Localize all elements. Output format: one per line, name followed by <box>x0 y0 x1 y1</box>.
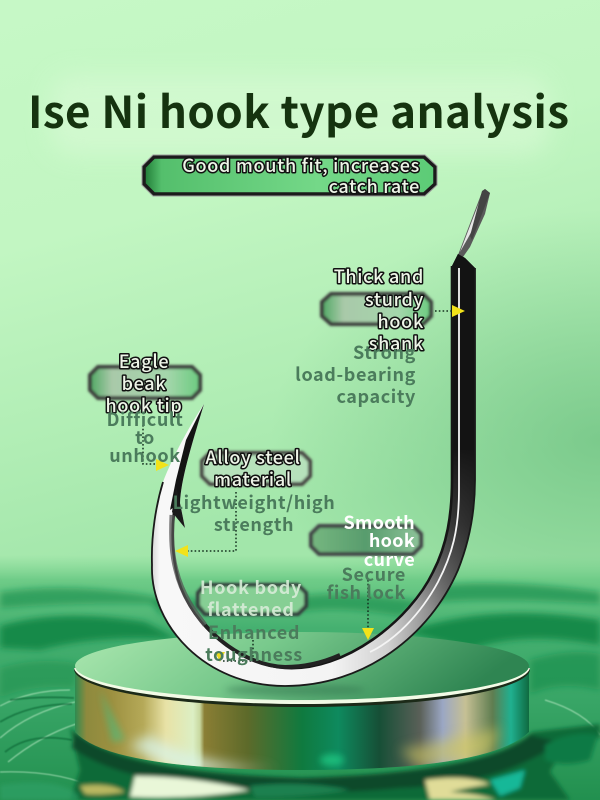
water surface <box>0 555 600 800</box>
pill: good mouth fit <box>142 155 437 196</box>
benefit: secure fish lock: fish lock <box>327 579 406 605</box>
label: alloy steel: material <box>214 466 292 492</box>
hook contact shadow <box>225 684 365 696</box>
hook eye <box>458 189 490 257</box>
platform rim <box>74 668 530 707</box>
benefit: secure fish lock: Secure <box>342 561 406 587</box>
pill: hook body <box>198 585 306 614</box>
label: smooth curve: curve <box>364 546 415 572</box>
leader: alloy <box>175 492 236 557</box>
pill: eagle beak <box>90 367 200 398</box>
benefit: load-bearing: capacity <box>336 383 416 409</box>
label: smooth curve: Smooth <box>343 509 415 535</box>
benefit: toughness: Enhanced <box>208 619 300 645</box>
hook tip shadow <box>170 404 204 510</box>
label: hook body: Hook body <box>200 574 302 600</box>
platform top <box>75 632 529 700</box>
benefit: lightweight: Lightweight/high <box>173 489 335 515</box>
benefit: load-bearing: Strong <box>353 339 416 365</box>
hook barb <box>172 486 185 528</box>
label: good mouth fit: Good mouth fit, increases <box>182 152 420 178</box>
label: hook body: flattened <box>207 596 295 622</box>
label: thick shank: shank <box>369 330 424 356</box>
pill: alloy steel <box>202 453 310 484</box>
label: thick shank: sturdy <box>365 286 424 312</box>
title: Ise Ni hook type analysis <box>28 77 569 141</box>
hook outer dark edge <box>152 268 475 686</box>
label: thick shank: hook <box>378 308 424 334</box>
hook left inner shade <box>172 515 205 625</box>
label: alloy steel: Alloy steel <box>205 444 301 470</box>
leader: eagle tip <box>143 425 169 471</box>
label: eagle beak: hook tip <box>106 392 182 418</box>
benefit: difficult to unhook: Difficult <box>107 406 183 432</box>
hook inner dark band <box>205 625 340 667</box>
hook <box>152 189 490 686</box>
platform side <box>75 672 529 770</box>
hook body steel <box>152 254 475 686</box>
platform highlight <box>74 668 530 704</box>
pill: smooth curve <box>311 526 421 554</box>
leader: smooth curve <box>362 580 374 640</box>
hook inner dark edge <box>173 266 452 668</box>
benefit: difficult to unhook: unhook <box>109 442 181 468</box>
label: smooth curve: hook <box>369 527 415 553</box>
leader: shank <box>435 305 465 317</box>
hook shank top <box>452 254 475 450</box>
benefit: load-bearing: load-bearing <box>295 361 416 387</box>
hook shank highlight <box>370 268 459 652</box>
dark reflection <box>70 724 600 800</box>
benefit: difficult to unhook: to <box>135 424 155 450</box>
label: eagle beak: Eagle <box>119 348 169 374</box>
platform <box>74 630 530 775</box>
label: eagle beak: beak <box>122 370 166 396</box>
benefit: toughness: toughness <box>205 641 303 667</box>
pill: thick shank <box>322 294 431 324</box>
label: thick shank: Thick and <box>334 263 424 289</box>
benefit: lightweight: strength <box>214 511 294 537</box>
hook shank dark <box>418 254 475 602</box>
label: good mouth fit: catch rate <box>329 173 420 199</box>
leader: hook body <box>215 640 253 662</box>
